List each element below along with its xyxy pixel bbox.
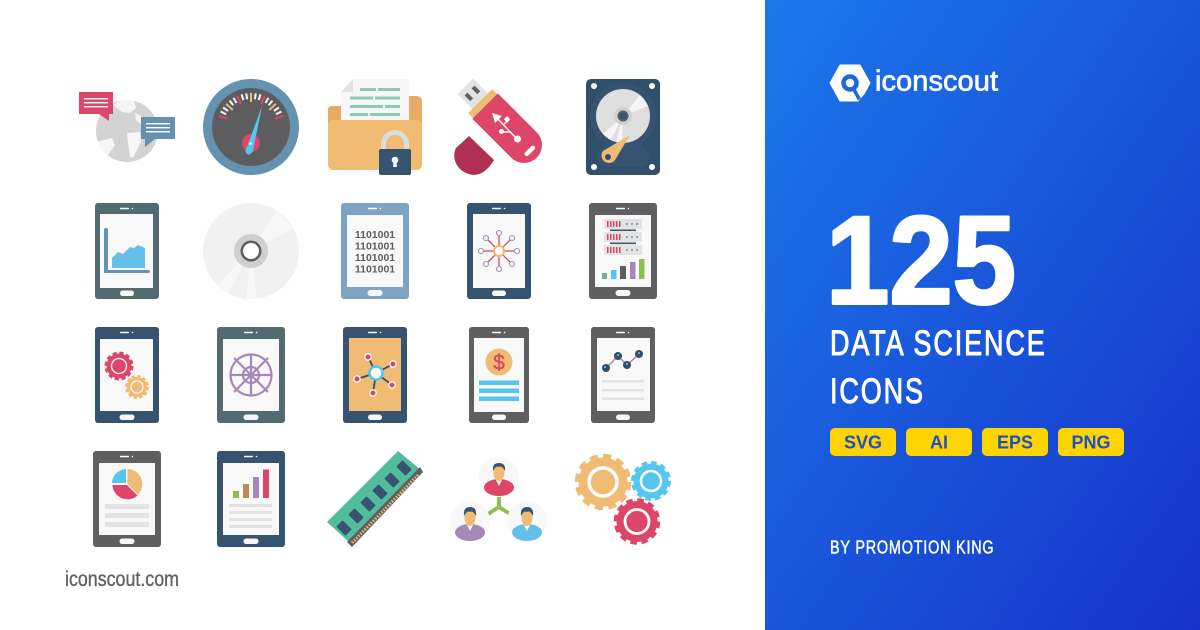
logo wordmark: iconscout [875, 66, 998, 98]
panel: white icon grid background [0, 0, 765, 630]
icon: tablet with binary code [341, 203, 409, 299]
icon: tablet with dollar coin: $ [493, 352, 505, 374]
icon: tablet with bar chart [217, 451, 285, 547]
icon: tablet with dollar coin [469, 327, 529, 423]
author credit: BY PROMOTION KING [830, 537, 994, 558]
person: left [450, 501, 490, 541]
icon: tablet with servers and bar chart [589, 203, 657, 299]
icon: hard disk drive [586, 79, 660, 175]
badge: PNG [1058, 428, 1124, 456]
icon: tablet with line chart [591, 327, 655, 423]
website label: iconscout.com [65, 568, 179, 591]
icon: USB flash drive [453, 74, 549, 175]
speech bubble: blue [141, 117, 175, 147]
badge: PNG: PNG [1071, 432, 1111, 452]
big number 125: 125 [826, 192, 1016, 330]
binary text: 1101001 [355, 252, 395, 264]
title line 1: DATA SCIENCE [830, 322, 1047, 363]
badge: SVG: SVG [844, 432, 882, 452]
binary text: 1101001 [355, 229, 395, 241]
logo mark [830, 65, 870, 101]
icon: globe with speech bubbles [79, 92, 175, 162]
icon: tablet with gears [95, 327, 159, 423]
binary text: 1101001 [355, 264, 395, 276]
person: right [507, 501, 547, 541]
badge: SVG [830, 428, 896, 456]
icon: speedometer gauge [203, 79, 299, 175]
icon: compact disc [203, 203, 299, 299]
icon: team of three people [450, 457, 547, 541]
connector [488, 497, 510, 514]
gear: orange [578, 456, 628, 508]
icon: folder with document and padlock [328, 79, 422, 175]
badge: AI [906, 428, 972, 456]
icon: RAM memory module [327, 451, 423, 547]
badge: EPS: EPS [997, 432, 1033, 452]
icon: tablet with area chart [95, 203, 159, 299]
icon: tablet with network diagram [467, 203, 531, 299]
binary text [355, 229, 395, 276]
gear: red [616, 500, 658, 542]
badge: EPS [982, 428, 1048, 456]
title line 2: ICONS [830, 370, 925, 411]
padlock [379, 132, 411, 175]
gear: blue [633, 463, 669, 499]
icon: three gears [578, 456, 669, 542]
speech bubble: red [79, 92, 113, 121]
icon: tablet with wheel diagram [217, 327, 285, 423]
badge: AI: AI [930, 432, 948, 452]
person: top [479, 457, 519, 497]
icon: tablet with pie chart [93, 451, 161, 547]
panel: blue gradient sidebar [765, 0, 1200, 630]
binary text: 1101001 [355, 240, 395, 252]
icon: tablet with hub nodes on orange screen [343, 327, 407, 423]
